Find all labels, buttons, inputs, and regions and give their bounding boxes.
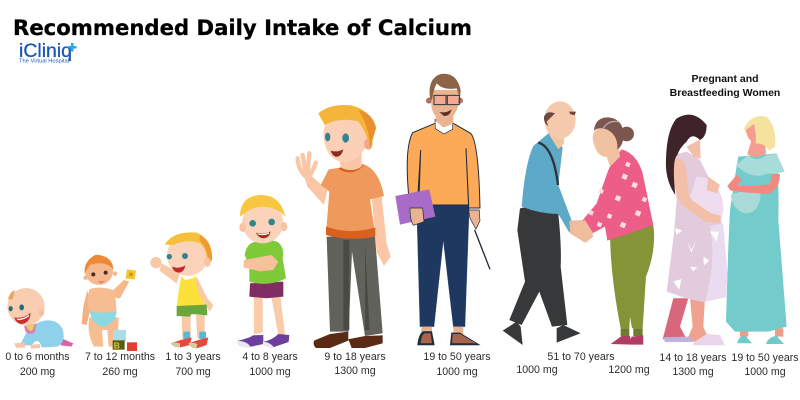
label: 19 to 50 years xyxy=(423,351,491,378)
figure: boy in green shirt with crossed arms xyxy=(237,195,289,347)
label: 9 to 18 years: 1300 mg xyxy=(334,365,376,377)
figure: pregnant woman in teal dress xyxy=(726,116,787,344)
figure: elderly couple holding hands xyxy=(503,101,654,345)
figure: crawling baby xyxy=(7,288,73,349)
subheading: pregnant and breastfeeding women xyxy=(670,73,780,99)
title: Recommended Daily Intake of Calcium xyxy=(13,16,472,40)
label: 9 to 18 years: 9 to 18 years xyxy=(324,351,386,363)
label: 51 to 70 years: 1200 mg xyxy=(608,364,650,376)
elderly man xyxy=(503,101,593,345)
label: 0 to 6 months: 200 mg xyxy=(20,366,55,378)
label: 14 to 18 years: 1300 mg xyxy=(672,366,714,378)
label: 0 to 6 months: 0 to 6 months xyxy=(5,351,70,363)
label: 19 to 50 years: 19 to 50 years xyxy=(423,351,491,363)
label: 19 to 50 years: 1000 mg xyxy=(436,366,478,378)
label: 7 to 12 months: 7 to 12 months xyxy=(85,351,155,363)
label: 1 to 3 years xyxy=(165,351,221,378)
label: pregnant 19 to 50 years: 1000 mg xyxy=(744,366,786,378)
figure: pregnant woman in lilac dress xyxy=(663,115,727,345)
label: 14 to 18 years: 14 to 18 years xyxy=(659,352,727,364)
label: 0 to 6 months xyxy=(5,351,70,378)
label: 7 to 12 months xyxy=(85,351,155,378)
figure: teacher with book and pointer xyxy=(395,74,490,345)
figure: baby in diaper with blocks: B xyxy=(114,341,120,351)
figure: teenage boy waving xyxy=(298,105,391,348)
subheading: pregnant and breastfeeding women: Breastfeeding Women xyxy=(670,87,780,99)
logo: iCliniq: The Virtual Hospital xyxy=(19,58,69,64)
label: 51 to 70 years xyxy=(516,351,650,376)
label: 7 to 12 months: 260 mg xyxy=(102,366,138,378)
figure: baby in diaper with blocks xyxy=(82,255,137,351)
elderly woman xyxy=(573,117,654,345)
label: 51 to 70 years: 1000 mg xyxy=(516,364,558,376)
label: 51 to 70 years: 51 to 70 years xyxy=(547,351,615,363)
figure: toddler in yellow vest xyxy=(150,232,213,348)
label: 9 to 18 years xyxy=(324,351,386,377)
label: 14 to 18 years xyxy=(659,352,727,378)
label: pregnant 19 to 50 years xyxy=(731,352,799,378)
label: 4 to 8 years: 1000 mg xyxy=(249,366,291,378)
label: 4 to 8 years: 4 to 8 years xyxy=(242,351,298,363)
label: 1 to 3 years: 700 mg xyxy=(175,366,211,378)
logo: iCliniq: iCliniq xyxy=(19,41,72,62)
subheading: pregnant and breastfeeding women: Pregnant and xyxy=(691,73,759,85)
label: 4 to 8 years xyxy=(242,351,298,378)
label: 1 to 3 years: 1 to 3 years xyxy=(165,351,221,363)
label: pregnant 19 to 50 years: 19 to 50 years xyxy=(731,352,799,364)
